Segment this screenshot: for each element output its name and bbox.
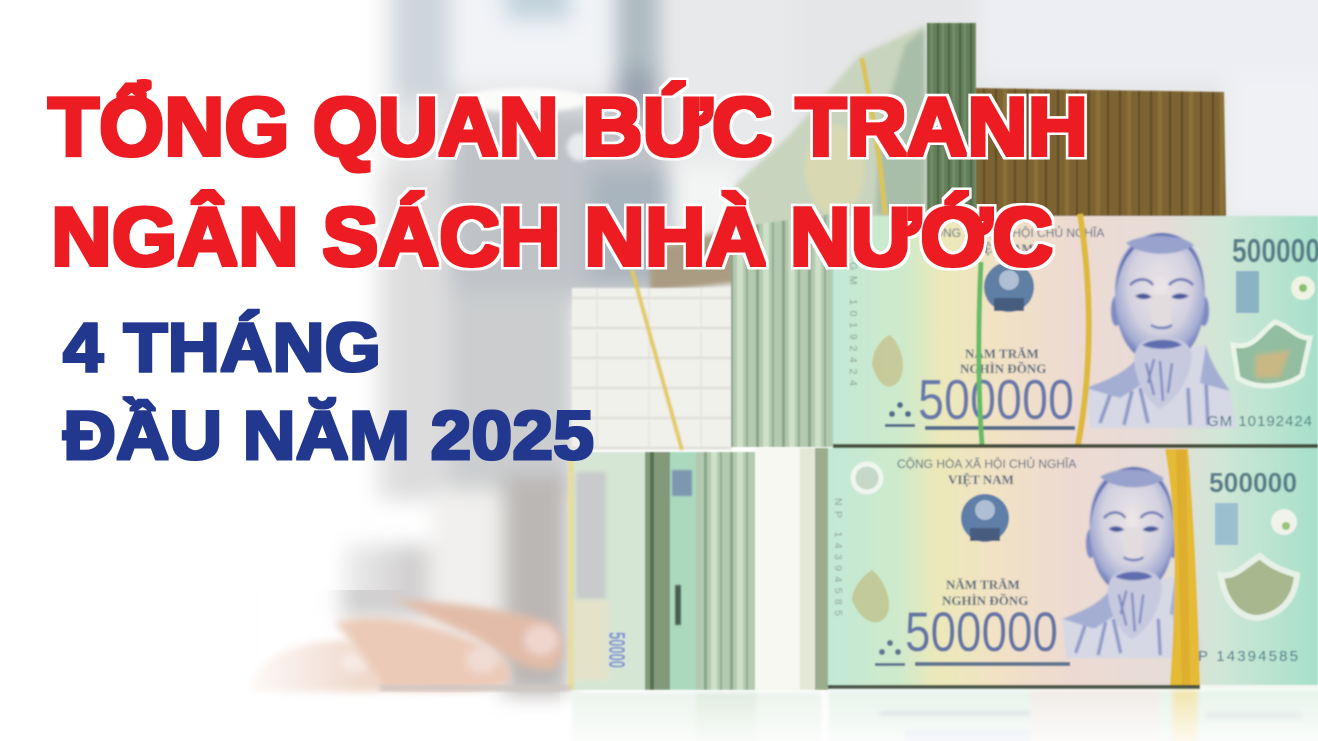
hand <box>250 600 570 692</box>
watermark flower <box>852 570 889 622</box>
lotus <box>1233 322 1310 386</box>
near finger <box>395 600 564 670</box>
issuer text: VIỆT NAM <box>970 242 1034 256</box>
corner mark <box>853 464 881 492</box>
white stack <box>572 270 732 450</box>
rubber band <box>1165 449 1200 686</box>
issuer text <box>897 456 1076 608</box>
green rubber band <box>979 262 982 445</box>
lower side stack: 50000 <box>604 632 629 668</box>
denomination: 500000 <box>905 600 1058 663</box>
issuer text: NĂM TRĂM <box>946 577 1020 592</box>
serial: GM 10192424 <box>1207 413 1312 430</box>
denomination: 500000 <box>918 368 1074 432</box>
top right value: 500000 <box>1209 467 1297 498</box>
vertical serial: GM 10192424 <box>847 262 859 386</box>
hand fade <box>230 590 360 700</box>
issuer text: CỘNG HÒA XÃ HỘI CHỦ NGHĨA <box>925 225 1104 240</box>
title line 1: TỔNG QUAN BỨC TRANH <box>48 80 1088 173</box>
emblem <box>961 494 1009 542</box>
dots <box>875 640 1070 666</box>
small mark <box>1215 503 1238 545</box>
issuer text <box>925 225 1104 376</box>
reflection <box>572 690 1318 741</box>
portrait <box>1062 467 1203 658</box>
middle finger <box>335 618 510 691</box>
serial: P 14394585 <box>1198 648 1298 665</box>
watermark flower <box>872 335 903 387</box>
backdrop highlights <box>460 88 593 161</box>
portrait <box>1086 233 1236 428</box>
upper side stack <box>731 214 833 447</box>
lower banknote <box>828 448 1318 686</box>
emblem <box>984 262 1034 312</box>
vertical serial: NP 14394585 <box>832 498 844 616</box>
upper banknote <box>833 214 1318 445</box>
yellow rubber band <box>1078 214 1089 445</box>
tan block under white stack <box>650 228 735 292</box>
left white fade <box>0 0 410 590</box>
issuer text: CỘNG HÒA XÃ HỘI CHỦ NGHĨA <box>897 456 1076 471</box>
issuer text: NGHÌN ĐỒNG <box>942 593 1028 608</box>
subtitle line 1: 4 THÁNG <box>63 309 381 386</box>
back green pack <box>735 23 976 290</box>
lower side stack <box>568 448 828 690</box>
back brown stack <box>976 88 1226 216</box>
dots <box>885 402 1075 430</box>
far finger <box>250 640 380 692</box>
clover <box>1271 509 1297 535</box>
small mark <box>1236 271 1259 313</box>
subtitle <box>63 309 594 474</box>
issuer text: NGHÌN ĐỒNG <box>960 361 1046 376</box>
issuer text: NĂM TRĂM <box>965 346 1039 361</box>
title <box>48 80 1088 283</box>
clover <box>1291 276 1315 300</box>
title line 2: NGÂN SÁCH NHÀ NƯỚC <box>51 190 1053 283</box>
photo: money stacks <box>568 23 1318 690</box>
lotus <box>1221 556 1297 618</box>
issuer text: VIỆT NAM <box>948 472 1014 487</box>
subtitle line 2: ĐẦU NĂM 2025 <box>63 397 594 474</box>
blurred office backdrop <box>340 0 1318 695</box>
